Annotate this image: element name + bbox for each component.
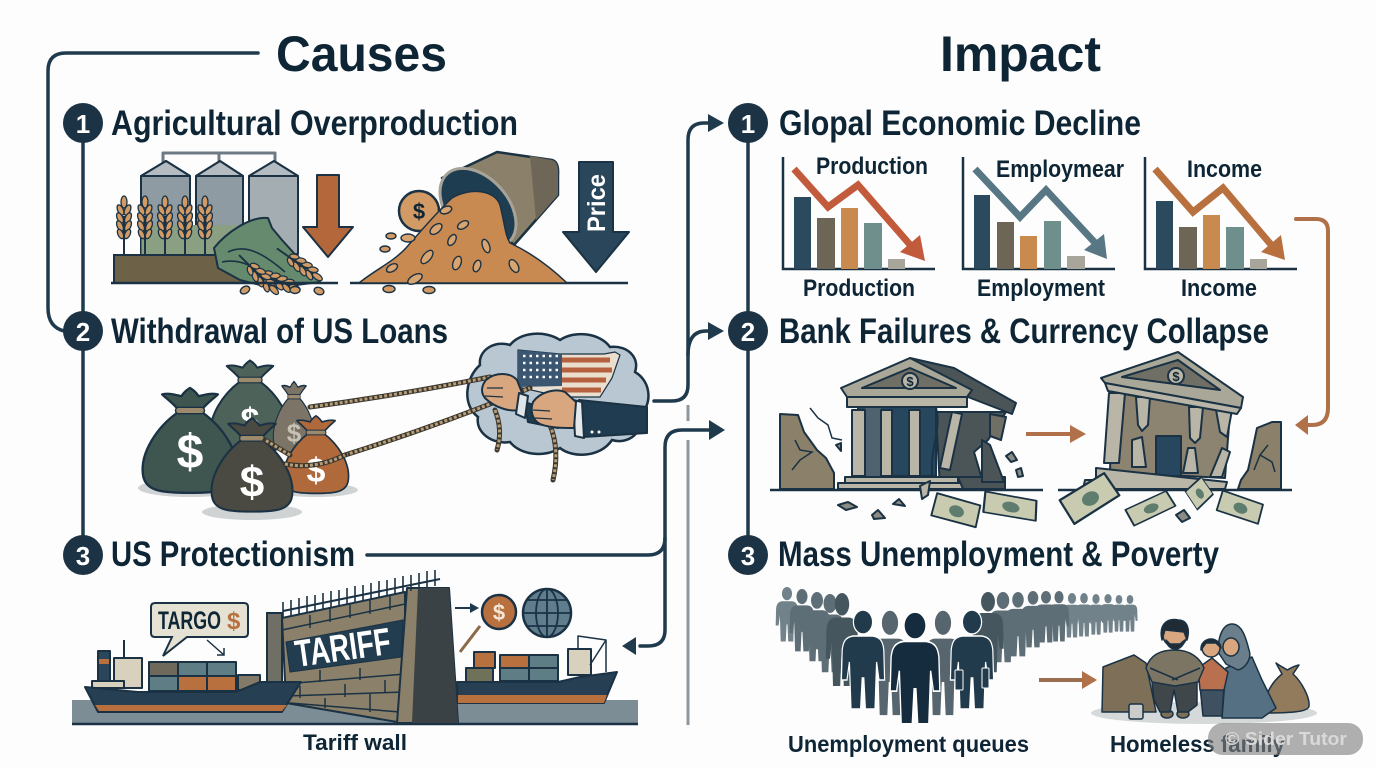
tariff label: TARIFF [292, 621, 393, 676]
icon: money bags: $ [241, 402, 260, 440]
icon: money bags: $ [307, 452, 326, 490]
chart: employment: Employment [977, 275, 1105, 302]
badge 3: 3 [76, 541, 90, 571]
badge 2: 2 [76, 317, 90, 347]
icon: unemployment queue [776, 587, 1138, 724]
chart: income [1145, 156, 1297, 302]
divider line [686, 405, 690, 725]
chart: production [783, 153, 935, 302]
watermark [1208, 723, 1363, 755]
panel: impact 1 global economic decline [728, 103, 1297, 302]
water band [72, 700, 638, 724]
icon: loose grains [239, 233, 435, 296]
watermark: © Sider Tutor [1225, 729, 1347, 749]
connector: causes bracket and timeline [48, 53, 258, 540]
icon: rubble [836, 443, 1190, 522]
icon: money bags [138, 360, 358, 520]
badge 2 [728, 311, 768, 351]
heading: Mass Unemployment & Poverty: Mass Unemployment & Poverty [778, 535, 1219, 574]
arrow: bank to bank [1026, 425, 1086, 443]
icon: money bags: $ [240, 458, 264, 507]
heading: Impact: Impact [940, 26, 1101, 82]
chart: employment [963, 156, 1124, 302]
caption: Tariff wall: Tariff wall [303, 730, 407, 755]
caption: Unemployment queues: Unemployment queues [788, 731, 1029, 757]
icon: coin [482, 595, 516, 629]
panel: impact 2 bank failures [728, 311, 1292, 532]
icon: globe [523, 589, 571, 637]
icon: money bags: $ [287, 418, 302, 448]
chart: employment: Employmear [996, 156, 1124, 183]
badge 3 [63, 535, 103, 575]
heading: Agricultural Overproduction: Agricultural Overproduction [111, 104, 518, 143]
icon: price down arrow [563, 162, 629, 272]
chart: production: Production [803, 275, 915, 302]
badge 1 [63, 103, 103, 143]
connector: protectionism arrows [367, 420, 725, 655]
ground line right [1058, 489, 1292, 491]
badge 2: 2 [741, 317, 755, 347]
icon: down arrow orange [303, 175, 353, 257]
icon: cloud with US map [467, 334, 648, 455]
badge 3 [728, 535, 768, 575]
icon: left cargo ship [85, 640, 301, 712]
badge 2 [63, 311, 103, 351]
icon: grain pile [359, 191, 567, 286]
heading: Glopal Economic Decline: Glopal Economic Decline [779, 104, 1141, 143]
panel: cause 3 US protectionism [63, 535, 638, 755]
icon: damaged bank: $ [1172, 369, 1180, 384]
icon: grain silos [141, 153, 298, 254]
icon: banknotes left [929, 487, 1041, 532]
panel: impact 3 mass unemployment [728, 535, 1317, 757]
heading: US Protectionism: US Protectionism [111, 535, 355, 574]
icon: damaged bank [1083, 352, 1243, 489]
connector: impact timeline [746, 135, 750, 540]
caption: Homeless family: Homeless family [1110, 731, 1285, 757]
icon: ropes [265, 377, 556, 480]
panel: cause 2 withdrawal of US loans [63, 311, 648, 520]
chart: income: Income [1181, 275, 1257, 302]
icon: cracked wall right [1238, 422, 1281, 489]
icon: small arrow [455, 603, 479, 613]
icon: tariff wall [267, 570, 458, 723]
ground line left [770, 489, 1043, 491]
chart: production: Production [816, 153, 928, 180]
icon: broken stick [460, 626, 480, 652]
icon: collapsing bank: $ [906, 374, 914, 389]
badge 3: 3 [741, 541, 755, 571]
icon: homeless family [1091, 620, 1317, 724]
icon: coin: $ [493, 600, 505, 625]
icon: soil bed [114, 255, 264, 283]
icon: wheat stalks [115, 196, 214, 254]
ground line [111, 282, 628, 284]
ground line [72, 723, 638, 725]
connector: brown arrow to banks [1295, 219, 1328, 435]
icon: cracked wall left [780, 408, 842, 489]
heading: Causes: Causes [276, 26, 447, 82]
arrow: queue to family [1039, 671, 1097, 689]
heading: Withdrawal of US Loans: Withdrawal of US Loans [111, 312, 448, 351]
icon: fallen wheat sheaf [214, 218, 327, 300]
icon: pulling hands [482, 374, 647, 438]
connector: loans to impact arrows [654, 114, 724, 401]
callout: TARGO $: $ [227, 608, 241, 635]
badge 1: 1 [741, 109, 755, 139]
icon: dollar coin: $ [413, 199, 425, 224]
badge 1 [728, 103, 768, 143]
callout: TARGO $: TARGO [158, 607, 221, 635]
icon: price down arrow: Price [583, 174, 611, 232]
icon: tipped barrel [425, 152, 558, 262]
icon: dollar coin [399, 191, 439, 231]
icon: right cargo ship [457, 636, 617, 703]
icon: collapsing bank [838, 358, 1016, 489]
badge 1: 1 [76, 109, 90, 139]
callout: TARGO $ [151, 603, 248, 656]
chart: income: Income [1187, 156, 1262, 183]
heading: Bank Failures & Currency Collapse: Bank Failures & Currency Collapse [779, 312, 1269, 351]
icon: banknotes right [1057, 471, 1266, 528]
icon: money bags: $ [177, 426, 204, 479]
panel: cause 1 agricultural overproduction [63, 103, 629, 300]
